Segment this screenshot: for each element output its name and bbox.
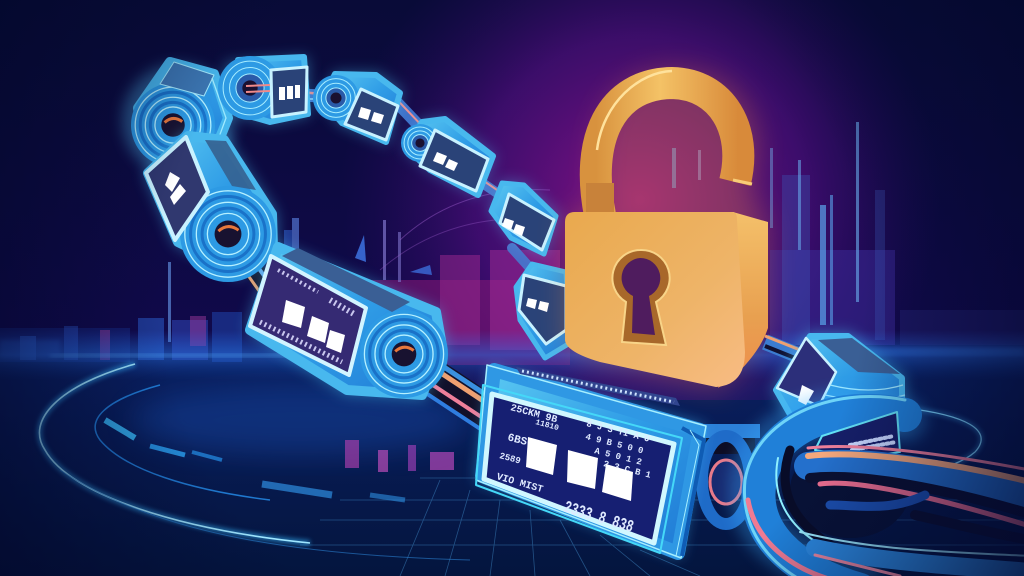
cables through link (808, 464, 1024, 500)
lock shackle (596, 83, 738, 215)
link lower band (815, 548, 1024, 572)
front block glow (476, 366, 705, 558)
chain block: large front: 8 J 3 TI A U (585, 419, 651, 445)
chain block: large front: 2589 (498, 451, 522, 466)
chain block: large front: A 5 0 1 2 (593, 446, 643, 468)
chain block: large front (476, 365, 706, 558)
right face of link (815, 412, 900, 458)
chain block: top third (313, 72, 403, 145)
chain block: large front: 6BS (506, 432, 529, 449)
chain cables: upper section (226, 87, 530, 438)
chain block: large middle (245, 242, 448, 400)
chain block: large front: VIO MIST (495, 472, 544, 496)
city skyline: right towers (672, 122, 1024, 345)
horizon glow (0, 330, 1024, 455)
front block body (482, 370, 700, 553)
chain block: top-left (122, 62, 234, 176)
glowing orbit rings (39, 364, 981, 560)
ground perspective grid (300, 478, 1024, 576)
front block white squares (526, 437, 557, 475)
chain block: large front: 2333 8 838 (561, 499, 635, 538)
city skyline: left (0, 262, 242, 362)
front block top strip (516, 367, 680, 406)
chain block: large front: 11810 (534, 418, 560, 433)
chain block: back right (772, 332, 906, 430)
lock front face (565, 212, 745, 387)
chain block: large left (143, 131, 278, 282)
link glow (751, 412, 905, 576)
link inner hole (790, 442, 910, 538)
chain block: top second (218, 56, 310, 124)
cable right of lock (765, 336, 815, 366)
small chrome connector link (700, 424, 760, 524)
lock glow (565, 70, 768, 390)
city skyline: centre (284, 190, 570, 365)
padlock (565, 70, 768, 390)
front block chip text: 25CKM 9B (509, 403, 558, 426)
chain block: large front: 4 9 B 5 0 0 (584, 432, 644, 456)
keyhole (612, 250, 670, 345)
reflection bars on ground (345, 440, 454, 472)
large chrome chain link, lower right (744, 397, 1024, 576)
chain block: fifth (488, 180, 560, 258)
lock right side (718, 212, 768, 388)
front block face (484, 394, 674, 543)
chain block: sixth behind lock (516, 264, 570, 358)
chain block: large front: 2 3 C B 1 (602, 459, 652, 481)
chain block: right fourth (401, 116, 496, 198)
